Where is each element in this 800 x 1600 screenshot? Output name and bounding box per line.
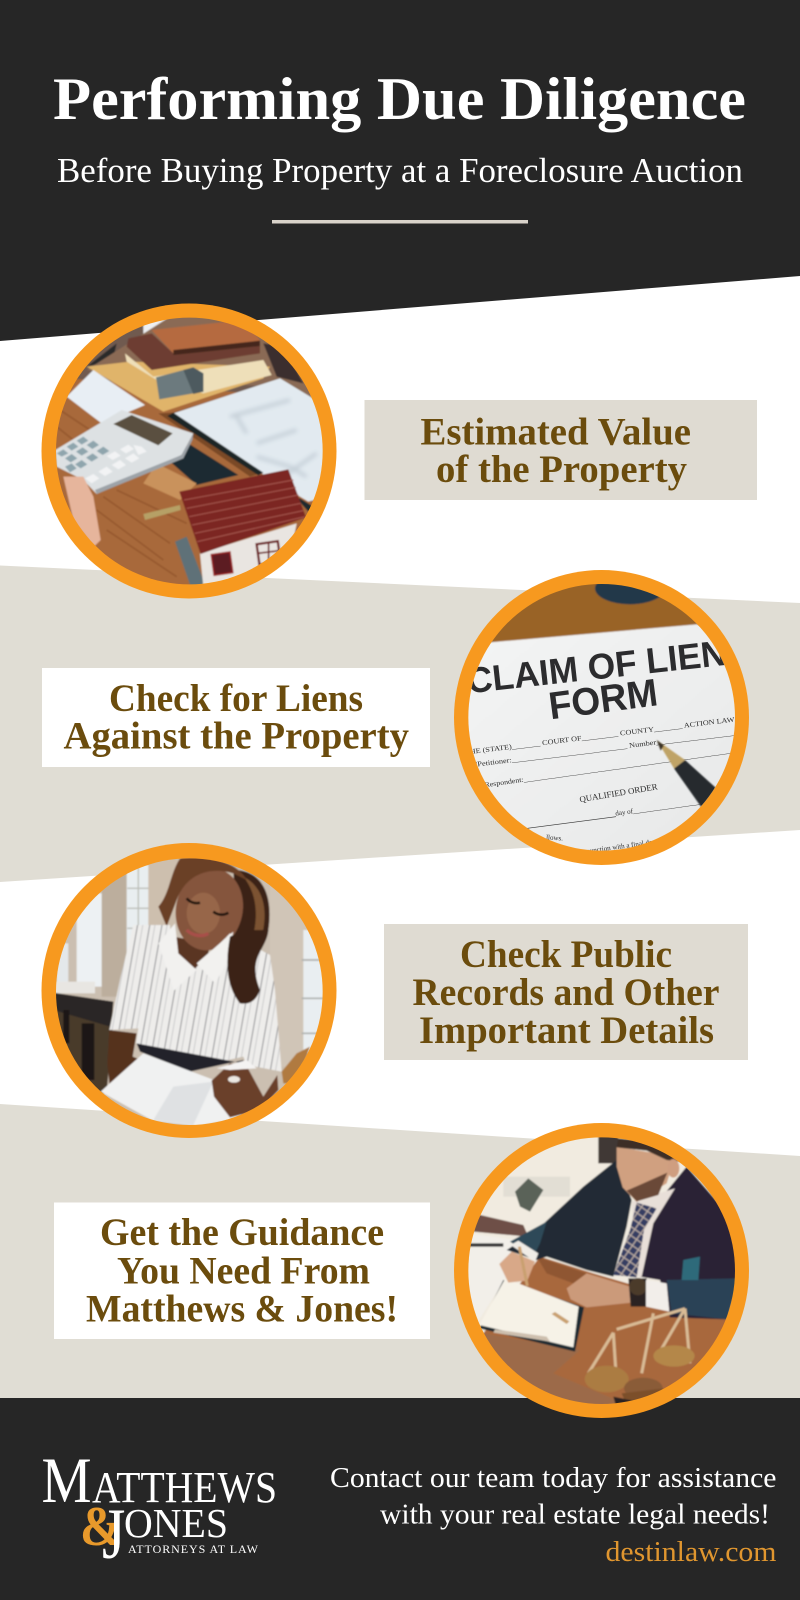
form lettering [465, 632, 736, 855]
panel: guidance label: Get the Guidance [100, 1211, 384, 1254]
form lettering: punction with a final decree [586, 837, 664, 855]
panel: guidance label [54, 1202, 430, 1339]
header divider [272, 220, 528, 224]
panel: liens label: Check for Liens [109, 677, 363, 720]
panel: liens label [42, 668, 430, 767]
form lettering: nt/Respondent:______________________________________________________ [476, 746, 735, 790]
logo: Matthews & Jones: & [80, 1496, 122, 1558]
logo: Matthews & Jones [42, 1445, 277, 1574]
logo: Matthews & Jones: ATTORNEYS AT LAW [128, 1542, 259, 1556]
form lettering: ff/Petitioner:____________________________ Number___________________ [469, 729, 736, 769]
form lettering: day of_______________________ [615, 796, 713, 818]
panel: estimated value label: of the Property [436, 448, 687, 491]
logo: Matthews & Jones: ONES [124, 1500, 228, 1546]
logo: Matthews & Jones: ATTHEWS [92, 1463, 277, 1512]
form lettering: HE (STATE)_______ COURT OF_________ COUNTY_______ ACTION LAW [469, 715, 735, 756]
logo: Matthews & Jones: J [102, 1495, 125, 1574]
header band [0, 0, 800, 341]
beige band 1 [0, 566, 800, 882]
panel: liens label: Against the Property [64, 714, 409, 758]
panel: public records label: Records and Other [412, 971, 720, 1014]
panel: guidance label: Matthews & Jones! [86, 1288, 398, 1330]
photo circle: desk with calculator and model house [42, 304, 336, 598]
logo: Matthews & Jones: M [42, 1445, 92, 1517]
footer band [0, 1398, 800, 1600]
footer contact line 2: with your real estate legal needs! [380, 1498, 770, 1530]
form lettering: CLAIM OF LIEN [465, 632, 728, 701]
photo circle: attorney signing documents with scales [454, 1123, 749, 1418]
photo circle: woman reviewing documents [42, 843, 336, 1138]
panel: estimated value label: Estimated Value [420, 410, 691, 454]
photo circle: claim of lien form [454, 570, 749, 865]
form lettering: QUALIFIED ORDER [579, 781, 658, 804]
footer contact line 1: Contact our team today for assistance [330, 1462, 776, 1494]
panel: public records label: Check Public [460, 933, 672, 976]
form lettering: FORM [546, 671, 660, 728]
panel: public records label: Important Details [419, 1009, 714, 1052]
panel: public records label [384, 924, 748, 1060]
beige band 2 [0, 1104, 800, 1400]
subtitle: Before Buying Property at a Foreclosure Auction [57, 151, 743, 190]
title: Performing Due Diligence [53, 66, 746, 132]
panel: estimated value label [364, 400, 757, 500]
form lettering: llows. [546, 833, 564, 843]
panel: guidance label: You Need From [117, 1250, 370, 1292]
footer website: destinlaw.com [606, 1536, 777, 1568]
